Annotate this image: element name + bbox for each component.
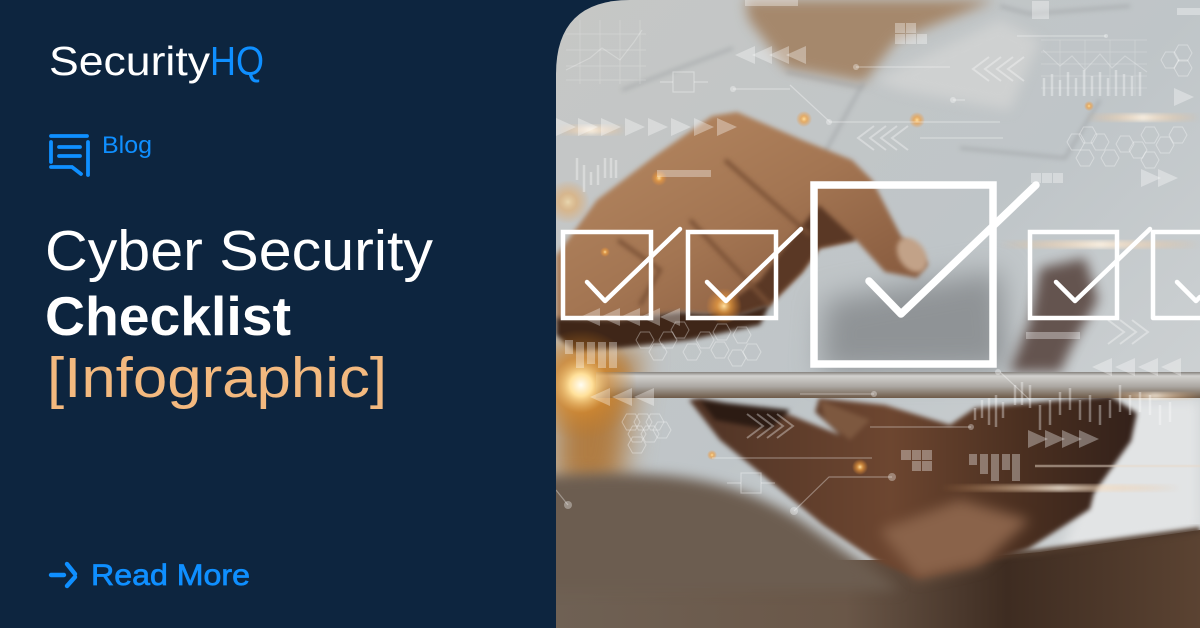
photo: table (520, 473, 1200, 628)
photo: lower hand (689, 396, 1137, 579)
photo: light streaks (556, 114, 1200, 491)
HUD: line chart (566, 20, 1147, 96)
call to action: Read More: Read More (91, 559, 250, 592)
checkbox 3 large (814, 185, 1036, 364)
category label: Blog: Blog (102, 132, 152, 159)
photo: neck and collar (622, 0, 1130, 170)
photo: tablet edge (596, 372, 1200, 398)
logo: SecurityHQ (49, 38, 264, 84)
photo panel (520, 0, 1200, 628)
checklist boxes (563, 185, 1200, 364)
checkbox 2 (688, 229, 801, 318)
HUD overlay graphics (556, 0, 1200, 515)
logo: SecurityHQ: HQ (210, 38, 264, 84)
title (45, 219, 434, 410)
icon: blog speech lines (51, 136, 88, 175)
HUD: node dots (564, 34, 1108, 515)
HUD: hexagon clusters (622, 45, 1192, 453)
photo: orange glows (525, 101, 1094, 475)
HUD: thin bar charts (577, 70, 1170, 430)
photo: pointing hand (556, 112, 934, 352)
icon: arrow (51, 564, 75, 586)
HUD: node boxes and lines (556, 36, 1106, 511)
photo: dark shirt shadows (556, 258, 1200, 555)
HUD: chevrons (747, 57, 1148, 438)
HUD: bars and squares (565, 0, 1200, 481)
checkbox 5 (1153, 232, 1200, 318)
checkbox 4 (1030, 229, 1150, 318)
checkbox 1 (563, 229, 680, 318)
title: Cyber Security (45, 219, 434, 283)
title: [Infographic] (47, 346, 387, 410)
logo: SecurityHQ: Security (49, 38, 211, 84)
title: Checklist (45, 285, 291, 347)
photo: shirt background (556, 0, 1200, 560)
HUD: triangle rows (556, 46, 1194, 448)
